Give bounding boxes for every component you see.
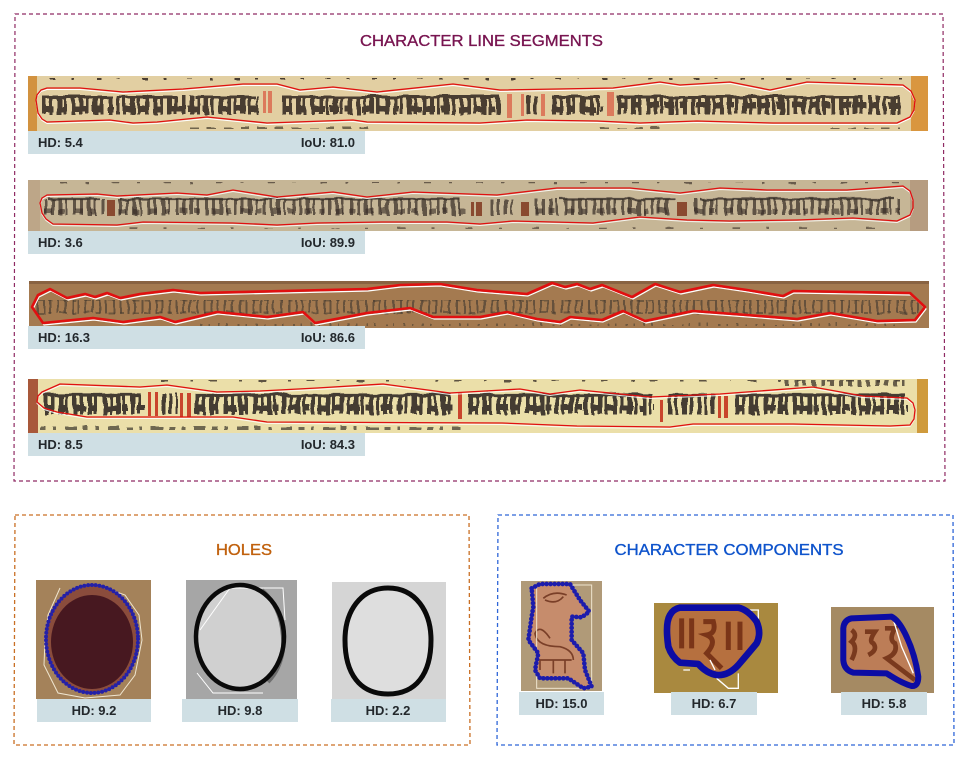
hole 1 metric bbox=[37, 699, 151, 722]
hole 2 bbox=[182, 580, 298, 722]
metrics bar 2: IoU: 89.9 bbox=[301, 235, 355, 250]
line segment 2 bbox=[28, 180, 928, 254]
component 2 bbox=[654, 603, 778, 715]
component 2 metric: HD: 6.7 bbox=[692, 696, 736, 711]
heading: character components: CHARACTER COMPONENTS bbox=[614, 542, 844, 559]
hole 3 bbox=[331, 582, 446, 722]
line segment 1 bbox=[28, 76, 928, 154]
component 1 bbox=[519, 581, 604, 715]
line segment 4 bbox=[28, 379, 928, 456]
component 3 bbox=[831, 607, 934, 715]
metrics bar 4: HD: 8.5 bbox=[38, 437, 83, 452]
heading: holes: HOLES bbox=[216, 542, 272, 559]
panel: character components bbox=[497, 515, 954, 745]
metrics bar 1 bbox=[28, 131, 365, 154]
metrics bar 1: HD: 5.4 bbox=[38, 135, 84, 150]
hole 2 metric: HD: 9.8 bbox=[218, 703, 262, 718]
metrics bar 2: HD: 3.6 bbox=[38, 235, 83, 250]
panel: holes bbox=[14, 515, 470, 745]
hole 2 metric bbox=[182, 699, 298, 722]
hole 3 metric: HD: 2.2 bbox=[366, 703, 410, 718]
metrics bar 1: IoU: 81.0 bbox=[301, 135, 355, 150]
heading: character line segments: CHARACTER LINE SEGMENTS bbox=[360, 33, 603, 50]
metrics bar 3: IoU: 86.6 bbox=[301, 330, 355, 345]
component 1 metric: HD: 15.0 bbox=[535, 696, 588, 711]
metrics bar 4: IoU: 84.3 bbox=[301, 437, 355, 452]
hole 1 metric: HD: 9.2 bbox=[72, 703, 116, 718]
line segment 3 bbox=[28, 281, 929, 349]
metrics bar 2 bbox=[28, 231, 365, 254]
component 3 metric: HD: 5.8 bbox=[862, 696, 906, 711]
hole 1 bbox=[36, 580, 151, 722]
metrics bar 3: HD: 16.3 bbox=[38, 330, 90, 345]
metrics bar 3 bbox=[28, 326, 365, 349]
panel: character line segments bbox=[14, 14, 945, 481]
metrics bar 4 bbox=[28, 433, 365, 456]
